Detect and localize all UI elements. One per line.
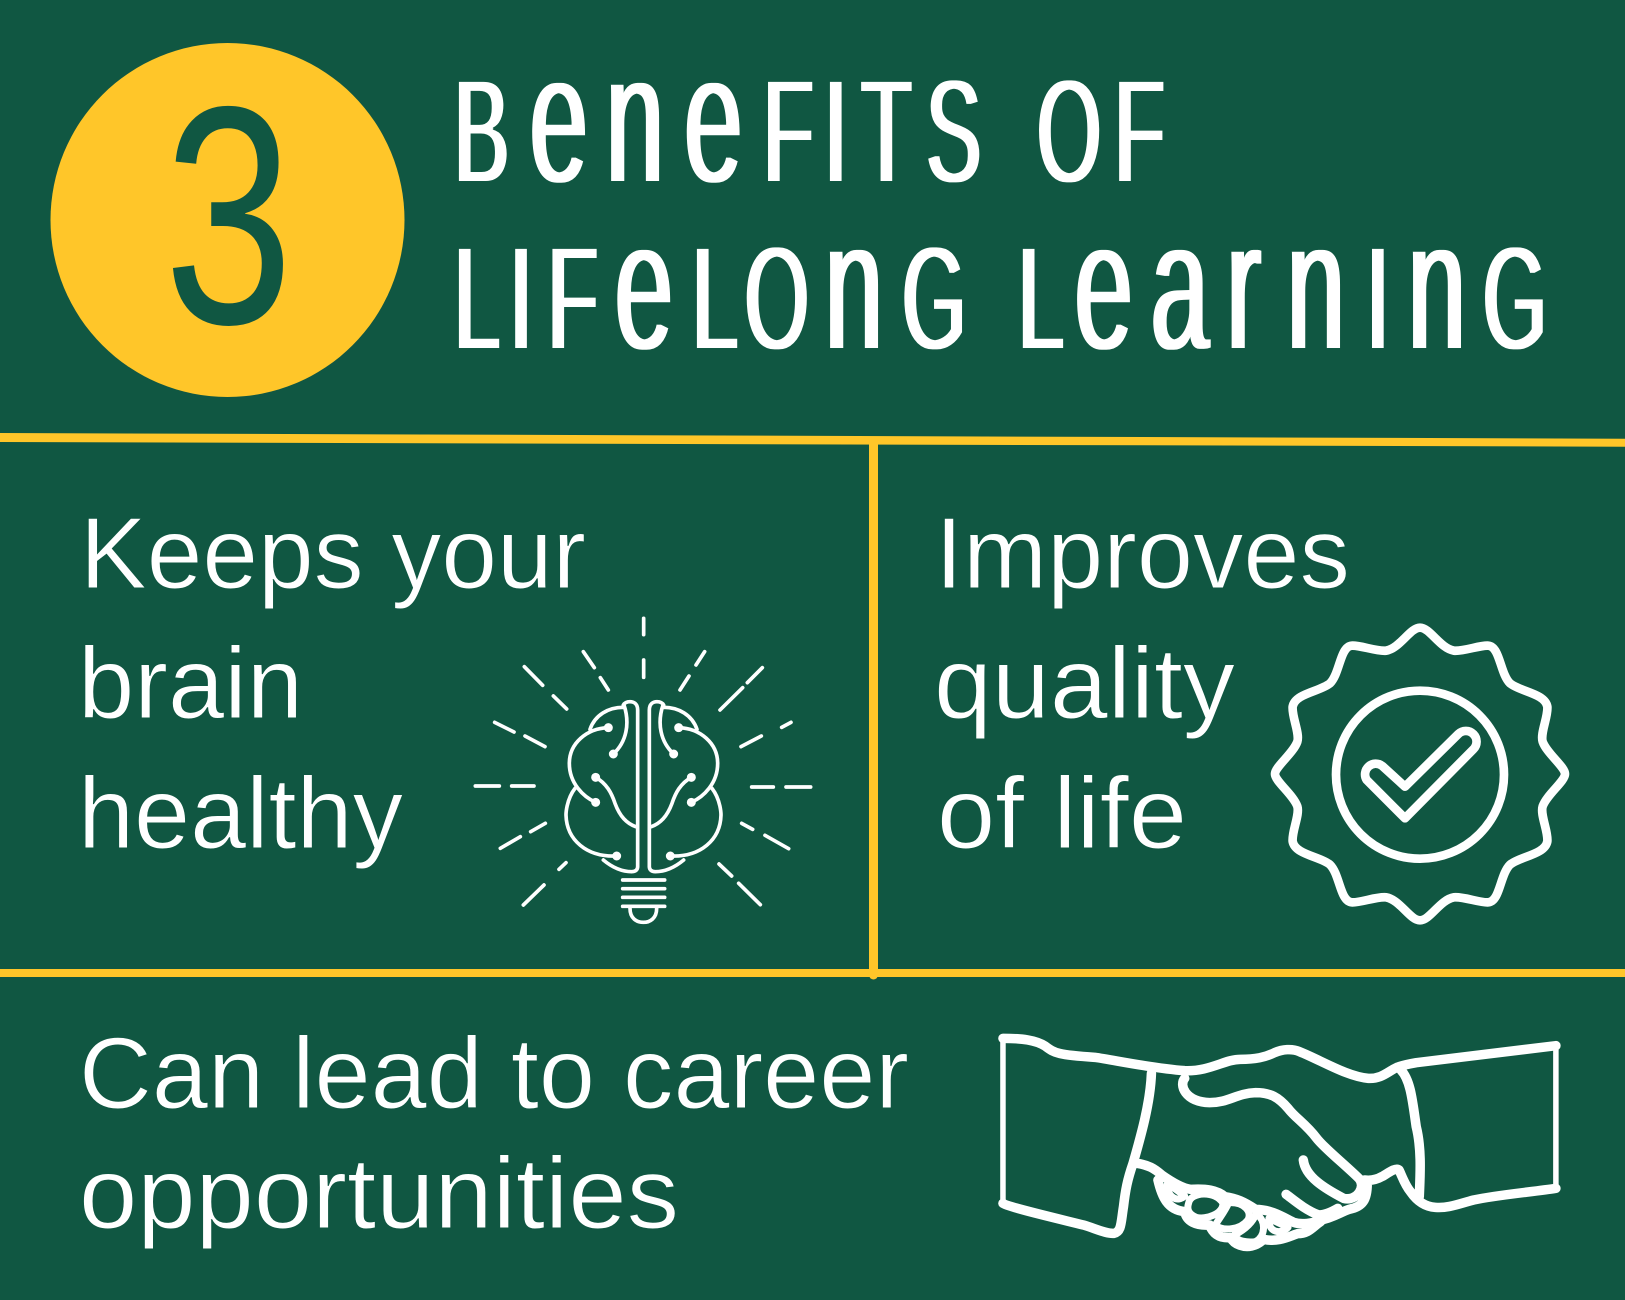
panel: improves quality of life <box>934 498 1565 920</box>
text block: keeps your brain healthy: brain <box>78 628 303 740</box>
bulb base <box>623 880 665 922</box>
badge: yellow circle with number 3 <box>50 43 404 397</box>
title: BeneFITS OF <box>454 14 1165 221</box>
rays <box>475 618 811 905</box>
text block: keeps your brain healthy <box>78 498 586 870</box>
icon: brain light bulb <box>475 618 811 922</box>
check mark <box>1365 731 1477 818</box>
divider: vertical yellow line <box>869 441 878 975</box>
divider: lower yellow line <box>0 969 1625 977</box>
hands and top contour <box>1003 1038 1556 1246</box>
text block: keeps your brain healthy: Keeps your <box>80 498 586 610</box>
sleeve edges <box>1003 1038 1556 1203</box>
fingers <box>1167 1183 1288 1242</box>
divider: top yellow line <box>0 433 1625 447</box>
text block: improves quality of life: quality <box>934 628 1236 740</box>
panel: can lead to career opportunities <box>79 1018 1556 1250</box>
text block: keeps your brain healthy: healthy <box>78 758 403 870</box>
brain right half <box>649 702 721 872</box>
text block: can lead to career opportunities <box>79 1018 909 1250</box>
text block: improves quality of life: of life <box>937 758 1187 870</box>
title <box>454 14 1547 388</box>
inner circle <box>1336 691 1504 859</box>
badge: yellow circle with number 3: 3 <box>164 43 293 390</box>
text block: improves quality of life <box>934 498 1350 870</box>
panel: header <box>50 14 1547 397</box>
icon: handshake <box>1003 1038 1556 1246</box>
wavy seal outline <box>1275 628 1565 920</box>
title: LIFeLOnG LearnInG <box>454 181 1547 388</box>
panel: keeps your brain healthy <box>78 498 811 922</box>
text block: can lead to career opportunities: Can lead to career <box>79 1018 909 1130</box>
icon: badge with check mark <box>1275 628 1565 920</box>
text block: can lead to career opportunities: opportunities <box>79 1138 679 1250</box>
text block: improves quality of life: Improves <box>935 498 1350 610</box>
brain left half <box>566 702 638 872</box>
